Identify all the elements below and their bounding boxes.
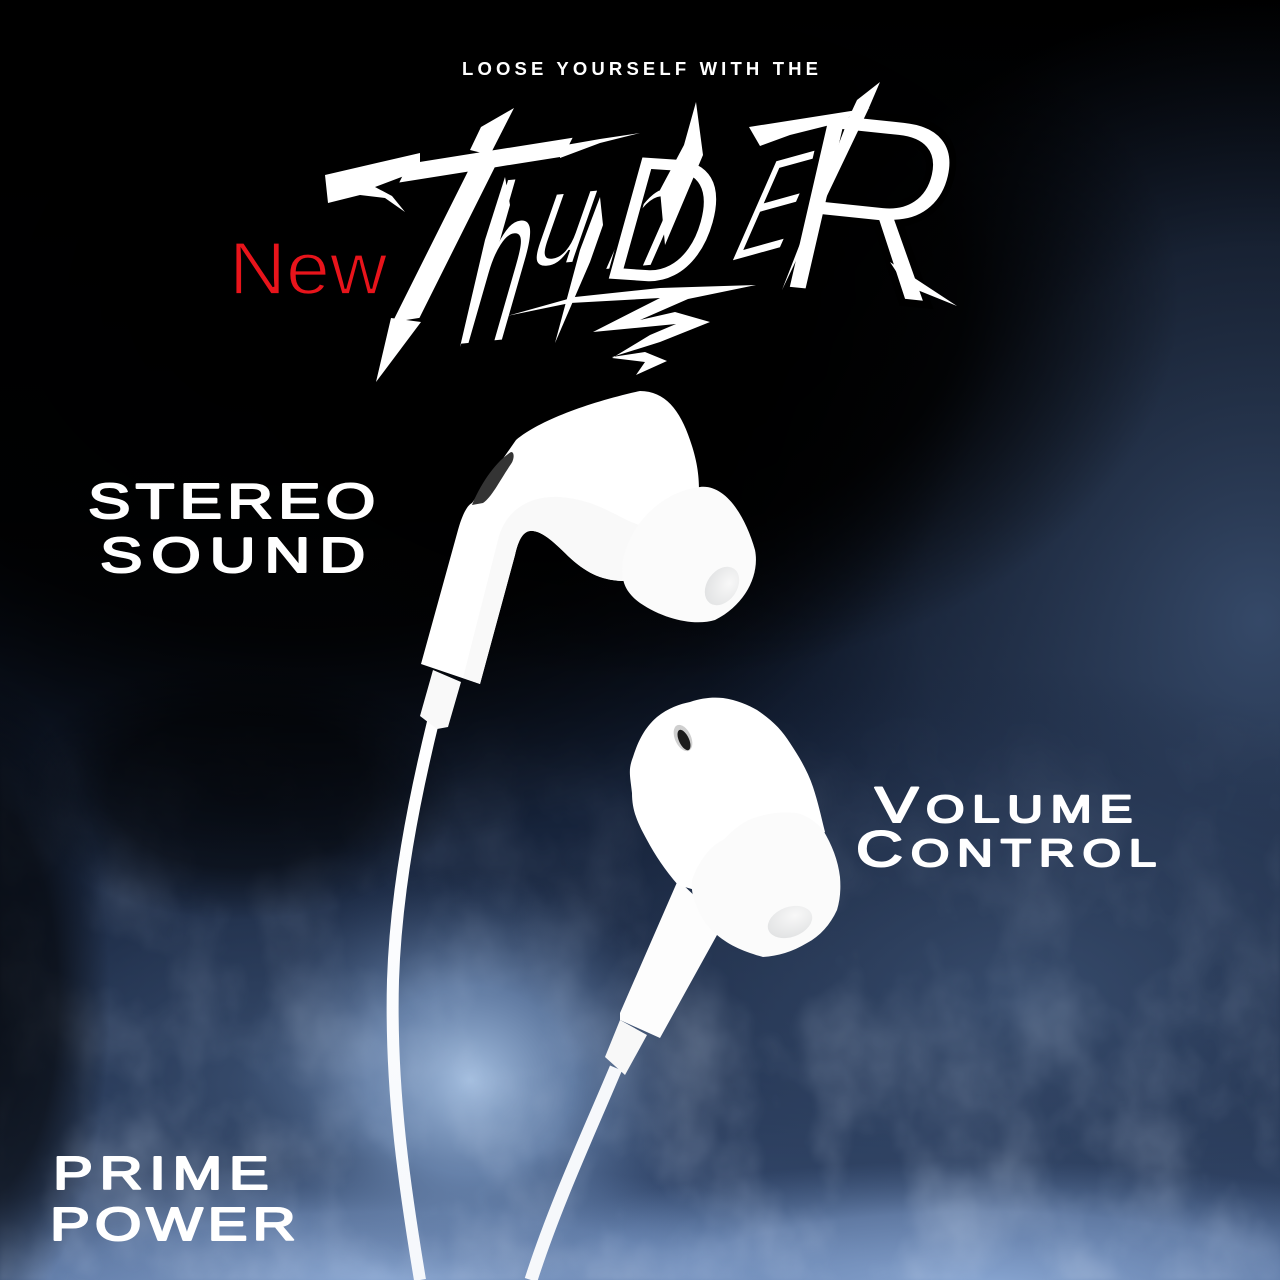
ear tip bbox=[622, 487, 756, 622]
stem bbox=[620, 880, 725, 1038]
label: volume control bbox=[856, 778, 1156, 877]
logo letters: D bbox=[584, 117, 748, 324]
logo letters: R bbox=[753, 53, 994, 361]
tip hole bbox=[698, 560, 746, 612]
tagline: LOOSE YOURSELF WITH THE bbox=[462, 58, 818, 79]
earbud: upper bbox=[420, 391, 756, 729]
label: New: New bbox=[229, 227, 388, 310]
logo letters: u bbox=[514, 135, 624, 298]
label: volume control: VOLUME bbox=[875, 778, 1132, 833]
label: stereo sound: SOUND bbox=[100, 529, 365, 583]
earbud shell bbox=[630, 698, 825, 890]
label: stereo sound bbox=[88, 475, 375, 583]
logo letters: T bbox=[291, 84, 606, 387]
logo letters: E bbox=[710, 113, 843, 295]
earbud: lower bbox=[605, 698, 840, 1075]
connector bbox=[605, 1020, 647, 1075]
label: prime power: PRIME bbox=[53, 1148, 269, 1199]
cable: right earbud bbox=[531, 1068, 616, 1280]
tip hole bbox=[763, 900, 817, 944]
logo flourishes bbox=[325, 82, 957, 382]
button bbox=[472, 452, 514, 505]
label: prime power: POWER bbox=[50, 1199, 296, 1250]
label: volume control: CONTROL bbox=[856, 822, 1156, 877]
logo letters: n bbox=[583, 129, 718, 303]
label: prime power bbox=[50, 1148, 296, 1250]
earbud body bbox=[421, 391, 699, 684]
body shading bbox=[463, 497, 640, 684]
connector bbox=[420, 670, 461, 729]
ear tip bbox=[692, 812, 840, 957]
logo: Thunder wordmark bbox=[291, 53, 994, 395]
logo letters: h bbox=[439, 132, 568, 395]
cable: left earbud bbox=[393, 722, 433, 1280]
vent slot bbox=[670, 722, 696, 754]
label: stereo sound: STEREO bbox=[88, 475, 375, 529]
logo lightning bolt bbox=[507, 285, 756, 375]
logo letters bbox=[291, 53, 994, 395]
